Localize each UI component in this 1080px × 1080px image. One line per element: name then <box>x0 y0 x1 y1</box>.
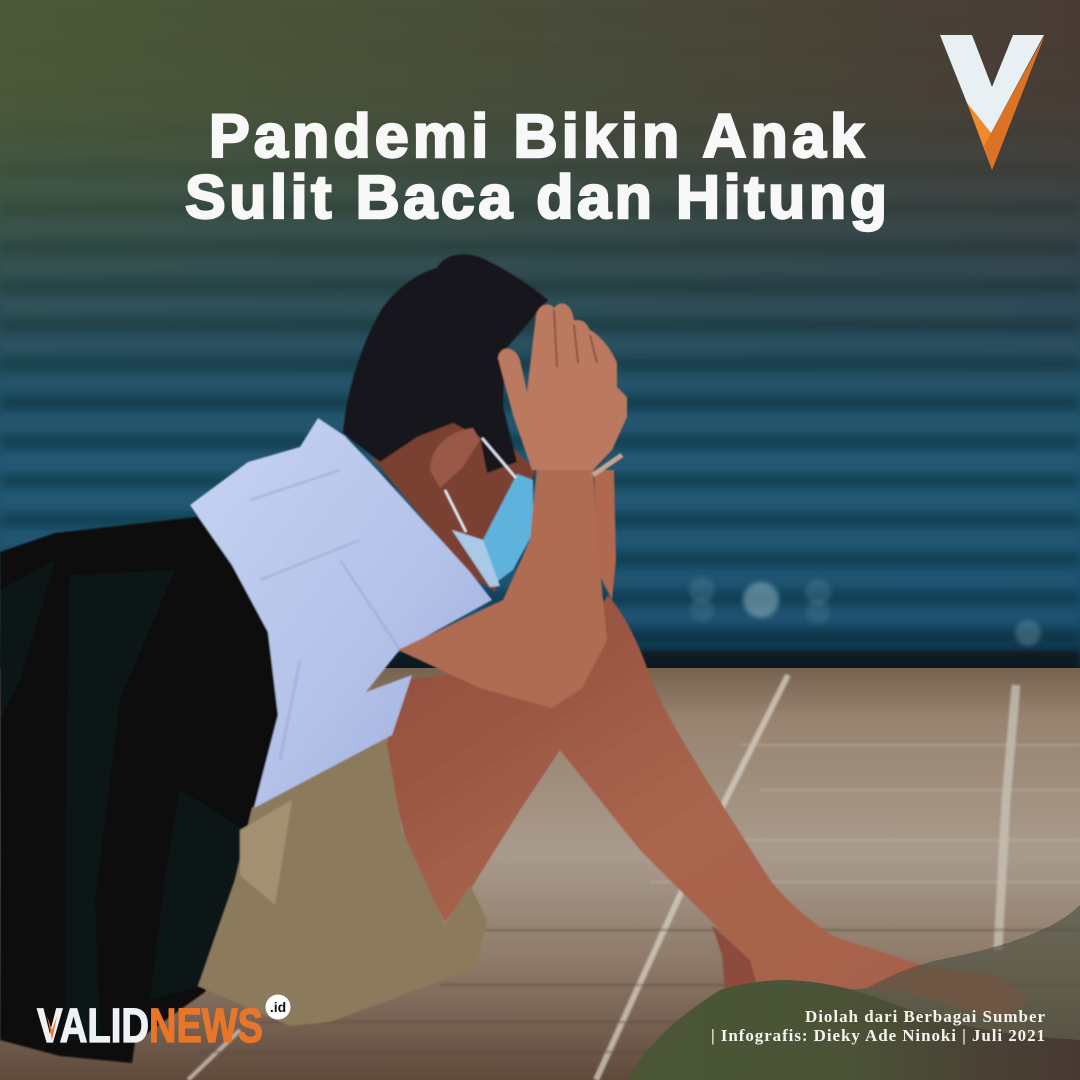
near arm <box>398 465 607 708</box>
shorts pocket <box>240 800 292 905</box>
shorts <box>198 733 487 1026</box>
logo: Validnews bottom left: .id <box>270 999 286 1015</box>
far foot <box>712 925 757 992</box>
child photo <box>0 254 1030 1063</box>
footer credits: Diolah dari Berbagai Sumber <box>805 1007 1045 1026</box>
background: blurred roller shutter wall <box>0 0 1080 676</box>
footer credits <box>711 1007 1045 1045</box>
hand <box>498 303 627 470</box>
shirt <box>190 418 492 808</box>
legs <box>385 595 1030 1020</box>
hair behind hand <box>590 397 618 467</box>
footer shape: translucent curve <box>750 905 1080 1080</box>
logo: V mark top right <box>940 35 1044 170</box>
shirt folds <box>250 470 400 760</box>
title: Sulit Baca dan Hitung <box>185 163 887 231</box>
hair <box>343 254 548 473</box>
logo: Validnews bottom left <box>37 994 290 1053</box>
title <box>185 102 887 231</box>
finger gaps <box>554 310 597 367</box>
far forearm <box>594 470 616 600</box>
logo: Validnews bottom left: NEWS <box>149 1000 263 1053</box>
neck and face <box>372 420 535 592</box>
surgical mask <box>445 438 533 587</box>
footer credits: | Infografis: Dieky Ade Ninoki | Juli 2021 <box>711 1026 1045 1045</box>
title: Pandemi Bikin Anak <box>209 102 864 170</box>
backpack <box>0 515 279 1063</box>
wristband <box>593 455 622 475</box>
floor tiles <box>0 668 1080 1080</box>
logo: Validnews bottom left: VALID <box>37 1000 149 1053</box>
footer shape: solid gradient curve <box>627 980 1080 1080</box>
ear <box>430 428 480 488</box>
